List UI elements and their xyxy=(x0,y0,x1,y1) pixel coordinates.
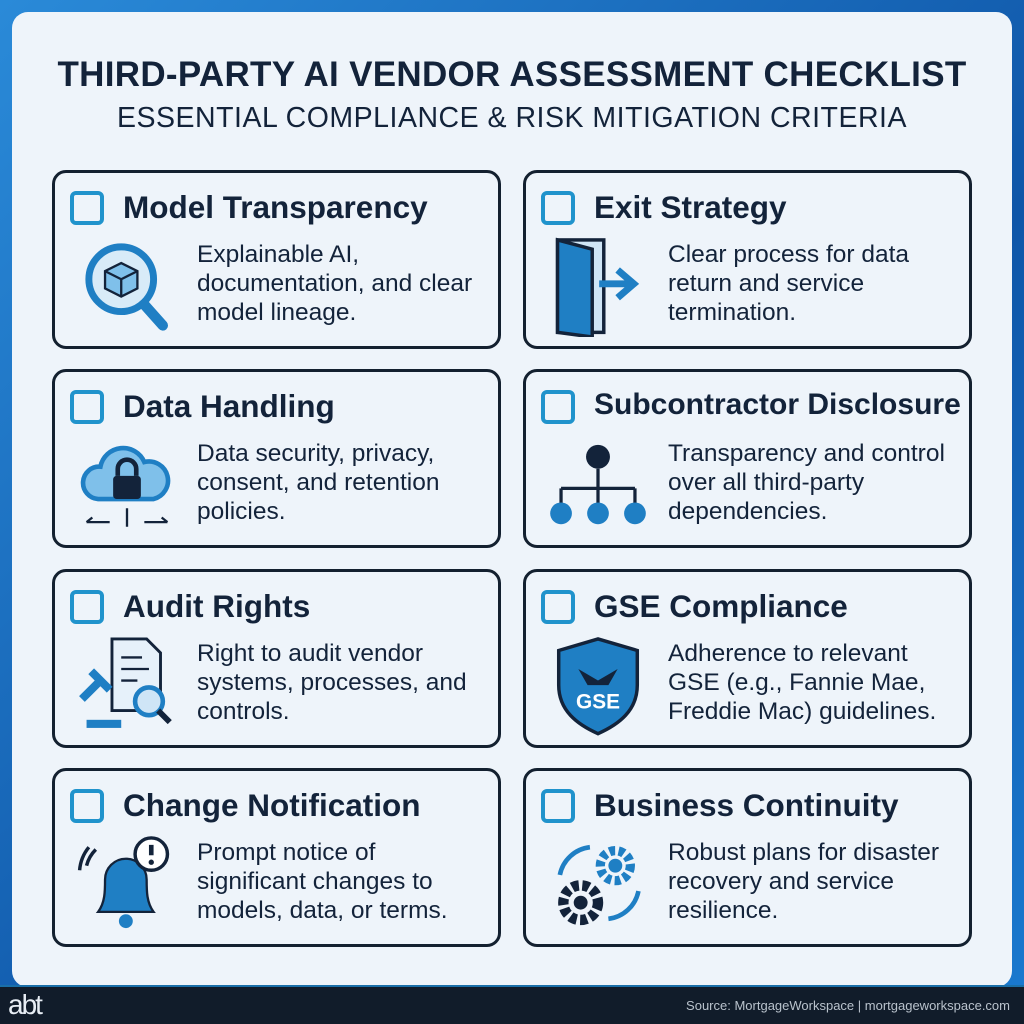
checkbox xyxy=(541,191,575,225)
heading: Change Notification xyxy=(123,787,420,823)
icon: hierarchy xyxy=(550,444,646,524)
card: business continuity xyxy=(523,768,972,947)
description: Data security, privacy, consent, and retention policies. xyxy=(197,440,439,525)
icon: shield GSE xyxy=(556,637,640,736)
title: THIRD-PARTY AI VENDOR ASSESSMENT CHECKLIST xyxy=(57,55,967,94)
heading: GSE Compliance xyxy=(594,588,848,624)
logo: abt xyxy=(8,989,41,1020)
checkbox xyxy=(541,390,575,424)
checkbox xyxy=(70,390,104,424)
card: GSE compliance xyxy=(523,569,972,748)
source text: Source: MortgageWorkspace | mortgageworkspace.com xyxy=(686,998,1010,1013)
card: model transparency xyxy=(52,170,501,349)
description: Clear process for data return and service termination. xyxy=(668,241,909,326)
card: audit rights xyxy=(52,569,501,748)
description: Explainable AI, documentation, and clear model lineage. xyxy=(197,241,472,326)
checkbox xyxy=(541,590,575,624)
checkbox xyxy=(70,191,104,225)
heading: Subcontractor Disclosure xyxy=(594,388,961,421)
card: change notification xyxy=(52,768,501,947)
description: Prompt notice of significant changes to models, data, or terms. xyxy=(197,839,448,924)
icon: cloud lock xyxy=(80,446,170,527)
description: Robust plans for disaster recovery and service resilience. xyxy=(668,839,939,924)
icon: magnifier cube xyxy=(85,243,168,331)
checkbox xyxy=(541,789,575,823)
card: subcontractor disclosure xyxy=(523,369,972,548)
description: Right to audit vendor systems, processes, and controls. xyxy=(197,640,467,725)
description: Adherence to relevant GSE (e.g., Fannie Mae, Freddie Mac) guidelines. xyxy=(668,640,936,725)
card: exit strategy xyxy=(523,170,972,349)
subtitle: ESSENTIAL COMPLIANCE & RISK MITIGATION CRITERIA xyxy=(117,102,907,134)
checkbox xyxy=(70,590,104,624)
heading: Model Transparency xyxy=(123,189,428,225)
heading: Exit Strategy xyxy=(594,189,787,225)
icon: bell alert xyxy=(78,836,170,928)
icon: door exit xyxy=(556,238,640,337)
icon: gavel document xyxy=(79,638,172,728)
description: Transparency and control over all third-party dependencies. xyxy=(668,440,945,525)
card: data handling xyxy=(52,369,501,548)
heading: Audit Rights xyxy=(123,588,310,624)
footer bar xyxy=(0,985,1024,1024)
heading: Business Continuity xyxy=(594,787,899,823)
heading: Data Handling xyxy=(123,388,335,424)
icon: gears cycle xyxy=(558,844,641,926)
icon: shield GSE: GSE xyxy=(576,690,620,713)
checkbox xyxy=(70,789,104,823)
